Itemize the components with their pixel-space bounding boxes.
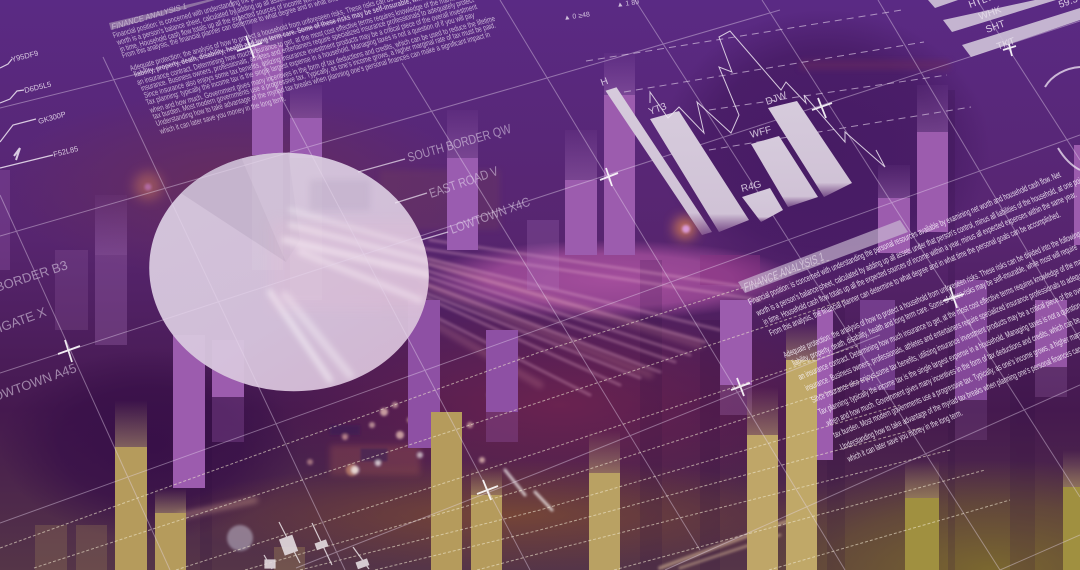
text panel: finance analysis right: Adequate protection: the analysis of how to protect a household from unforeseen risks. These risks can be divided into the following:: [781, 228, 1080, 360]
chart: gold columns: [35, 323, 1080, 570]
bar chart labels: DJW: [764, 90, 789, 108]
dashed lines: upper chart set: [586, 10, 971, 150]
text panel: finance analysis top left: [109, 0, 497, 136]
traffic bokeh: [227, 392, 493, 551]
left sparkline labels: GK300P: [37, 109, 67, 126]
text panel: finance analysis right: worth is a person's balance sheet, calculated by adding up all assets under that person's control, minus all liabilities of the household, at one point: [753, 173, 1080, 318]
light trails: [180, 240, 790, 568]
text panel: finance analysis right: [738, 169, 1080, 464]
text panel: finance analysis right: liability, property, death, disability, health and long term care. Some of these risks may be self-insurable, while most will require: [790, 242, 1079, 368]
left sparkline labels: D6D5L5: [23, 80, 52, 95]
text panel: finance analysis top left: Understanding how to take advantage of the myriad tax breaks when planning one's personal finances can make a significant impact in: [155, 31, 492, 128]
pie chart: [149, 152, 429, 392]
candlesticks bottom: [264, 522, 369, 569]
text panel: finance analysis right: FINANCE ANALYSIS 1: [743, 251, 825, 295]
text panel: finance analysis right: From this analysis, the financial planner can determine to what degree and in what time the personal goals can be accomplished.: [767, 209, 1062, 338]
text panel: finance analysis right: in time. Household cash flow totals up all the expected sources of income within a year, minus all expected expenses within the same year.: [761, 189, 1078, 327]
crosshair markers: [58, 36, 1016, 500]
bar chart labels: [599, 76, 789, 195]
left sparkline labels: [0, 49, 79, 168]
table bars top right: WHK: [977, 4, 1003, 23]
top indicators: [563, 0, 640, 22]
top indicators: ▲ 0 ≥48: [563, 11, 590, 22]
left sparkline labels: F52L85: [52, 144, 79, 159]
gauge arcs right: [1045, 67, 1080, 170]
text panel: finance analysis top left: Since insurance also enjoys some tax benefits, utilizing insurance investment products may be a critical piece of the overall investment: [143, 4, 479, 100]
text panel: finance analysis top left: which it can later save you money in the long term.: [158, 95, 287, 136]
region labels with leader lines: LOWTOWN X4C: [448, 194, 532, 237]
region labels with leader lines: SOUTH BORDER QW: [406, 121, 513, 165]
region labels with leader lines: EAST ROAD V: [427, 163, 500, 201]
table bars top right: SHT: [984, 19, 1007, 36]
text panel: finance analysis top left: Tax planning: typically the income tax is the single largest expense in a household. Managing taxes is not a question of if you will pay: [145, 12, 476, 107]
dashed lines: lower rising set: [0, 260, 1010, 570]
table bars top right: [928, 0, 1080, 57]
bar chart labels: YT3: [647, 101, 669, 118]
bar chart labels: R4G: [740, 179, 763, 195]
text panel: finance analysis right: Financial position: is concerned with understanding the personal resources available by examining net worth and household cash flow. Net: [746, 169, 1063, 307]
zigzag line: [650, 31, 885, 167]
text panel: finance analysis top left: FINANCE ANALYSIS 1: [111, 1, 188, 32]
text panel: finance analysis right: which it can later save you money in the long term.: [844, 407, 964, 464]
bar chart labels: WFF: [749, 125, 773, 141]
table bars top right: TKT: [995, 36, 1017, 53]
bar chart labels: H: [599, 76, 610, 89]
region labels with leader lines: [0, 121, 532, 407]
text panel: finance analysis top left: tax burden. Most modern governments use a progressive tax. Typically, as one's income grows, a higher marginal rate of tax must be paid.: [152, 22, 497, 121]
text panel: finance analysis top left: when and how much. Government gives many incentives in the form of tax deductions and credits, which can be used to reduce the lifetime: [148, 15, 497, 115]
bar chart: diagonal bars: [606, 87, 852, 235]
left sparkline labels: Y95DF9: [10, 49, 39, 64]
